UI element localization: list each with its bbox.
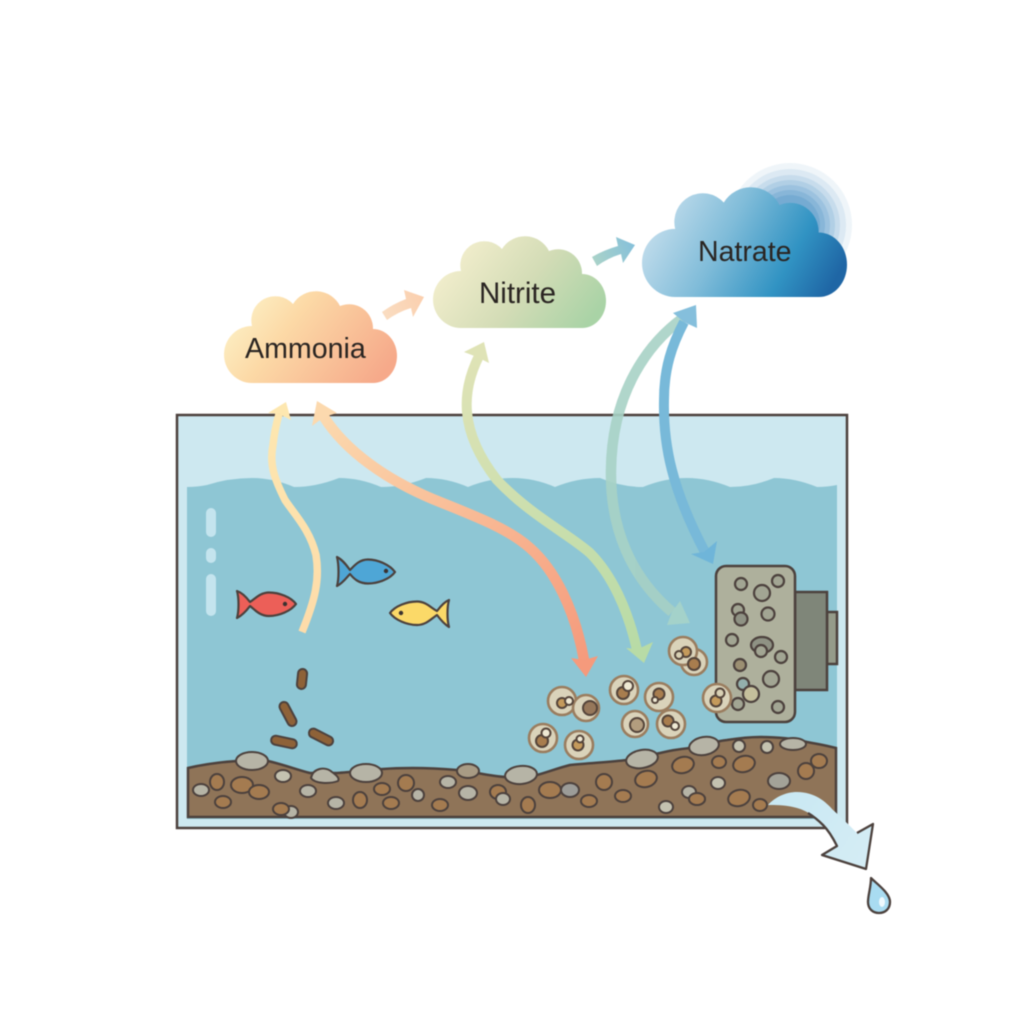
cloud: ammonia	[224, 291, 397, 383]
filter unit	[716, 566, 837, 722]
arrow: nitrate exchange with filter, green	[611, 318, 690, 625]
fish food pellets	[270, 669, 335, 749]
nitrifying bacteria colonies	[529, 637, 731, 759]
fish: red	[237, 591, 296, 618]
arrow: ammonia to bacteria	[312, 401, 598, 677]
fish: blue	[337, 557, 395, 586]
arrow: nitrite to nitrate step	[592, 237, 635, 266]
cloud: nitrite	[433, 236, 606, 328]
arrow: bacteria to nitrite	[464, 342, 653, 663]
fish eye: yellow	[399, 611, 403, 615]
pebbles: grey	[193, 735, 806, 818]
fish eye: red	[283, 602, 287, 606]
aquarium tank	[177, 415, 847, 828]
fish: yellow	[390, 600, 449, 627]
air bubbles column	[206, 508, 216, 616]
label: Ammonia: Ammonia	[245, 333, 366, 365]
arrow: ammonia to nitrite step	[382, 290, 424, 320]
concentric glow rings	[728, 163, 852, 287]
water body	[187, 478, 837, 819]
arrow: nitrate exchange with filter, blue	[664, 305, 717, 564]
release arrow: water change outflow	[768, 792, 873, 869]
label: Natrate: Natrate	[698, 236, 791, 268]
arrow: fish waste to ammonia	[268, 402, 317, 632]
pebbles: brown	[210, 753, 827, 813]
water droplet	[868, 878, 890, 913]
fish eye: blue	[384, 569, 388, 573]
substrate	[188, 735, 836, 818]
glass and air gap	[177, 415, 847, 828]
label: Nitrite: Nitrite	[479, 277, 556, 310]
cloud: nitrate with glow	[642, 163, 852, 297]
